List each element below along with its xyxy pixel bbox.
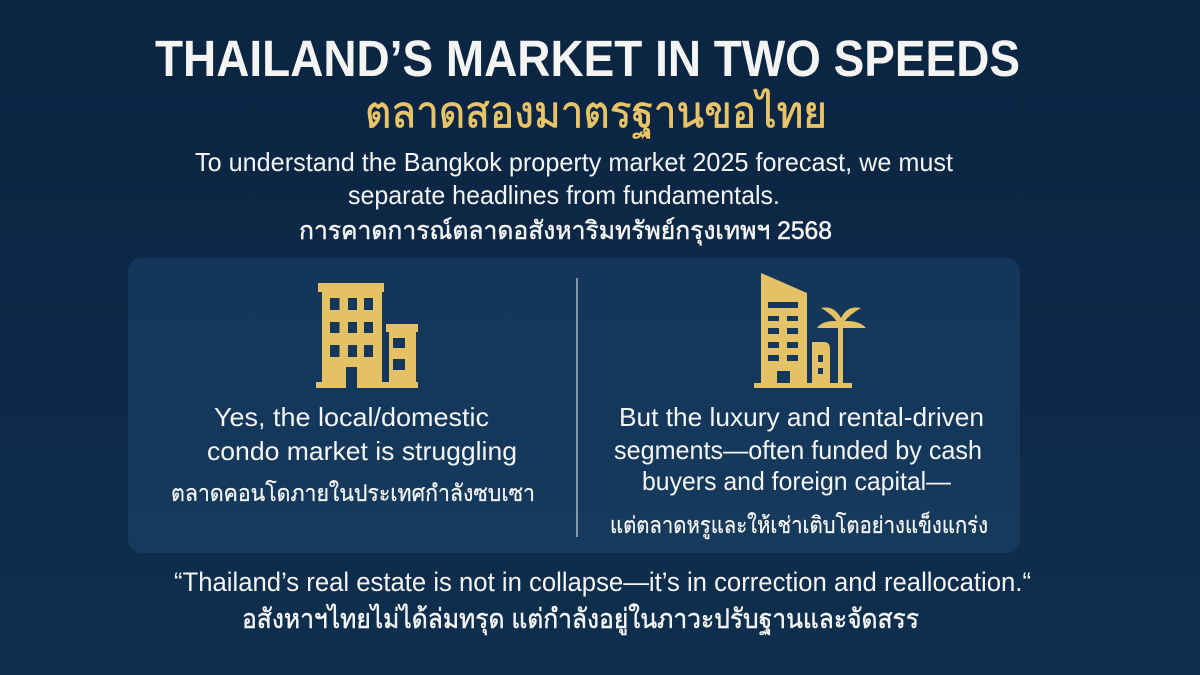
icon: condo buildings <box>316 283 418 388</box>
left segment text: Yes, the local/domestic <box>214 402 489 432</box>
right segment text: buyers and foreign capital— <box>642 466 951 496</box>
quote: อสังหาฯไทยไม่ได้ล่มทรุด แต่กำลังอยู่ในภาวะปรับฐานและจัดสรร <box>242 603 919 636</box>
Thai subtitle: ตลาดสองมาตรฐานขอไทย <box>365 88 827 138</box>
intro text block: separate headlines from fundamentals. <box>348 180 780 210</box>
panel: two market segments <box>128 258 1020 553</box>
right segment text: segments—often funded by cash <box>614 435 982 465</box>
right segment text: But the luxury and rental-driven <box>619 402 984 432</box>
left segment text: ตลาดคอนโดภายในประเทศกำลังซบเซา <box>171 480 535 506</box>
left segment text <box>171 402 535 506</box>
right segment text <box>610 402 988 539</box>
quote <box>174 567 1031 636</box>
icon: luxury tower and palm <box>754 273 866 388</box>
intro text block: To understand the Bangkok property market 2025 forecast, we must <box>195 147 954 177</box>
left segment text: condo market is struggling <box>207 436 517 466</box>
right segment text: แต่ตลาดหรูและให้เช่าเติบโตอย่างแข็งแกร่ง <box>610 510 988 539</box>
title: THAILAND’S MARKET IN TWO SPEEDS <box>155 30 1020 87</box>
intro text block <box>195 147 954 246</box>
intro text block: การคาดการณ์ตลาดอสังหาริมทรัพย์กรุงเทพฯ 2568 <box>299 217 832 246</box>
quote: “Thailand’s real estate is not in collapse—it’s in correction and reallocation.“ <box>174 567 1031 597</box>
